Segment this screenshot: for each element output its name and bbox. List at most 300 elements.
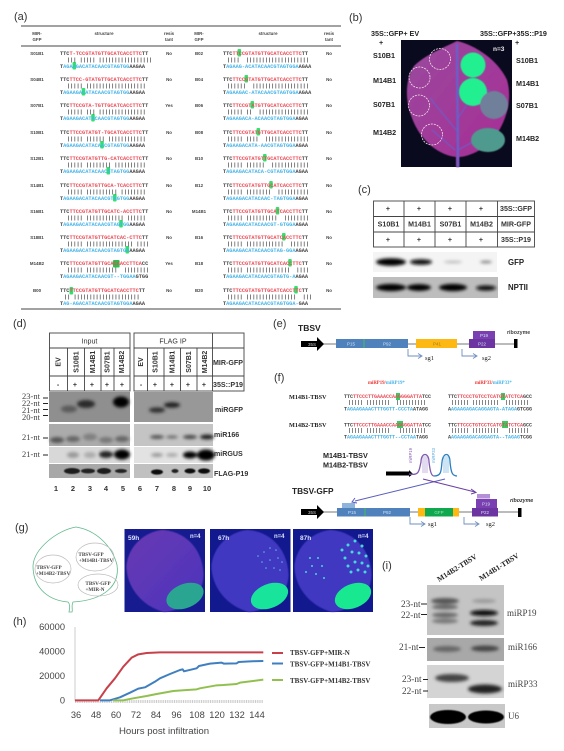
infiltration ellipses: +M14B1-TBSV [79,558,113,564]
right column rows: ||||| |||||||||||||| |||| [227,268,309,274]
right labels: 35S::GFP+35S::P19 [480,29,547,38]
size markers [22,391,48,459]
panel i: small RNA blots [382,551,538,728]
panel a: sequence table [14,11,341,309]
condition table: M14B1 [90,351,97,373]
M14B2 sequences: TTCTTCCCTTGAAACCAAGGGGATTATCC [344,422,431,428]
lane numbers: 3 [88,484,92,493]
left column rows: ||||| ||| ||||||||||||||| [67,110,146,116]
right column rows: TTCTTCCGTATGTTGCATCACCTTCTT [223,261,308,267]
right column rows: TAGAAGACA-ACAACGTAGTGGAAGAA [223,116,309,122]
condition table: M14B2 [470,220,493,228]
panel label a: (a) [14,11,27,23]
panel label h: (h) [13,616,26,628]
left column rows: No [166,209,172,214]
left column rows: S18B1 [30,235,44,240]
x axis labels: 144 [249,710,265,720]
right column rows: No [326,130,332,135]
sequence headers: miRP19/miRP19* [368,381,405,386]
ribozyme label: ribozyme [510,498,533,504]
y axis labels: 0 [60,696,65,706]
FLAG-P19 blot [49,464,213,478]
left column rows: TTCTTCCGTATGTTGCATC-ACCTTCTT [60,209,148,215]
M14B2 sequences: TTCTTCCCTGTCCTCATGTATCTCAGCC [448,422,532,428]
panel c: western blot [358,184,534,298]
condition table: MIR-GFP [501,220,531,228]
right column rows: B08 [195,130,204,135]
condition table: M14B2 [119,351,126,373]
condition table: + [479,236,483,244]
blot labels: GFP [508,258,524,267]
table header [32,31,335,42]
sg labels [428,521,495,528]
right column rows: B02 [195,51,204,56]
right column rows: TAGAAGACATACAACGTAGTG-AAGAA [223,274,309,280]
construct names [289,394,327,429]
left column rows: ||||| |||||||||||| |||||| [67,216,146,222]
legend [272,649,370,685]
right column rows: TAGAAGACATACAAC-TAGTGGAAGAA [223,196,309,202]
sg labels [425,355,491,362]
left column rows: TTCT-TCCGTATGTTGCATCACCTTCTT [60,51,148,57]
left labels: 35S::GFP+ EV [371,29,419,38]
leaf outline diagram [33,527,117,612]
TBSV-GFP genes: GFP [434,510,444,515]
GFP blot [373,252,497,272]
panel label c: (c) [358,184,371,196]
left column rows: TTCTTCC-GTATGTTGCATCACCTTCTT [60,77,148,83]
right column rows: |||| |||||||||||||||||||| [227,58,309,64]
construct names: M14B2-TBSV [289,422,327,429]
M14B1 sequences: TTCTTCCCTTGAAACCAAGGGGATTATCC [344,394,431,400]
y axis labels [39,622,65,706]
right column rows: ||||| |||||||| |||||||||| [227,190,309,196]
left column rows: S12B1 [30,156,44,161]
lane numbers [54,484,211,493]
photo 67h [210,529,292,614]
sequence headers: miRP33/miRP33* [475,381,512,386]
size markers: 21-nt [22,405,41,415]
left labels: M14B2 [373,128,396,137]
right column rows: TTCTTCCGTATGTTGCATCACCTTCTT [223,235,308,241]
condition table: + [386,205,390,213]
photo 67h: n=4 [274,534,285,540]
condition table: MIR-GFP [213,359,243,367]
size markers: 22-nt [402,687,422,697]
x axis labels: 108 [189,710,205,720]
right column rows: TTCTTCCGTATGTTGCATCACCTTCTT [223,130,308,136]
right column rows: TTCTTCCGTATGTTGCATCACCTTCTT [223,103,308,109]
y axis labels: 40000 [39,646,65,656]
right labels: + [515,38,519,47]
photo 87h: 87h [300,535,311,542]
left column rows: TAGAAGACATACAACGTAGTGGAAGAA [60,116,146,122]
right column rows [192,49,332,307]
left column rows: TTCTTCCGTATGTTGCATCACCTTCTT [60,288,145,294]
right column rows: No [326,209,332,214]
left column rows: TAGAAGACATACAACGTAGTGGAAGAA [60,143,146,149]
panel label d: (d) [13,318,26,330]
condition table: S10B1 [378,220,399,228]
M14B1 sequences: AAGAAGAGACAGGAGTA-ATAGAGTCGG [448,406,532,412]
right column rows: TAGAAGACATACA-CGTAGTGGAAGAA [223,169,309,175]
panel h: line chart [13,616,370,737]
U6 blot [429,704,505,728]
lane numbers: 10 [203,484,211,493]
legend: TBSV-GFP+M14B1-TBSV [290,660,370,668]
left labels: S07B1 [373,100,395,109]
condition table: + [448,205,452,213]
condition table: 35S::GFP [500,205,532,213]
condition table: + [73,381,77,389]
x axis labels [71,710,265,720]
lane numbers: 7 [155,484,159,493]
left column rows: No [166,77,172,82]
size markers: 23-nt [22,391,41,401]
left column rows: TTCTTCCGTATGT-TGCATCACCTTCTT [60,130,148,136]
left column rows: TTCTTCCGTATGTTGCA-TCACCTTCTT [60,183,148,189]
genes: P92 [383,342,391,346]
infiltration ellipses: +M14B2-TBSV [36,571,70,577]
construct names: M14B1-TBSV [289,394,327,401]
left column rows: Yes [165,103,173,108]
miRP19 blot [427,585,504,635]
right column rows: TAGAAGAC-ATACAACGTAGTGGAAGAA [223,90,312,96]
left column rows: No [166,235,172,240]
right column rows: B12 [195,183,204,188]
condition table [50,333,244,391]
right column rows: No [326,51,332,56]
left column rows: M14B2 [30,261,45,266]
data lines [75,652,263,700]
left column rows: No [166,183,172,188]
table header: tant [165,37,174,42]
condition table [374,201,534,247]
size markers: 20-nt [22,412,41,422]
right column rows: No [326,77,332,82]
x axis labels: 48 [91,710,101,720]
table header: structure [94,31,114,36]
miRGUS blot [49,447,215,463]
dashed circles [408,48,450,145]
blot labels: FLAG-P19 [214,470,248,478]
left column rows: TTCTTCCGTATGTTG-CATCACCTTCTT [60,156,148,162]
size markers: 21-nt [399,643,419,653]
right column rows: TAGAAGACATA-AACGTAGTGGAAGAA [223,143,309,149]
genes: P41 [433,342,441,346]
left column rows: S16B1 [30,209,44,214]
lane labels: M14B1-TBSV [477,551,521,583]
amiRNA construct labels [323,451,368,470]
M14B2 sequences [344,421,532,440]
condition table: + [386,236,390,244]
right column rows: B06 [195,103,204,108]
TBSV-GFP genes: P22 [481,510,489,515]
left column rows: TAGAAGACATACAACGTAGTGGAAGAA [60,222,146,228]
genes: P22 [478,342,486,346]
n label: n=3 [493,46,505,53]
condition table: + [202,381,206,389]
infiltration ellipses: TBSV-GFP [36,565,62,571]
photo 59h: 59h [128,535,139,542]
right column rows: ||||| |||||| |||||||||||| [227,162,309,168]
panel e: TBSV genome [273,318,530,362]
condition table: M14B1 [170,351,176,373]
genes: P15 [347,342,355,346]
condition table: EV [138,357,145,367]
x axis labels: 120 [209,710,225,720]
left column rows: TAGAAGACATACAACGT--TGGAAGTGG [60,274,148,280]
panel c: western blot: NPTII [508,283,528,292]
TBSV-GFP genes: P15 [348,510,356,515]
35S arrow [301,505,324,519]
TBSV-GFP genes: P19 [482,502,490,506]
panel g: infiltration diagram and photos [15,522,375,614]
panel label b: (b) [349,12,362,24]
size markers: 21-nt [22,449,41,459]
sg labels: sg1 [425,355,434,362]
right column rows: No [326,183,332,188]
condition table: S10B1 [74,351,80,373]
left column rows: ||||| |||||||| |||||||||| [67,162,146,168]
condition table: + [120,381,124,389]
lane numbers: 2 [71,484,75,493]
condition table: 35S::P19 [501,236,531,244]
right column rows: M14B1 [192,209,207,214]
lane labels [435,551,521,584]
hairpin precursor: miRP33 [431,447,436,463]
right column rows: TTCTTCCGTATGTTGCATCACCTTCTT [223,183,308,189]
left column rows: ||||| |||||||||| |||||||| [67,190,146,196]
sg labels: sg2 [486,521,495,528]
right column rows: ||||| |||||||||| |||||||| [227,216,309,222]
condition table: - [57,381,60,389]
photo 67h: 67h [218,535,229,542]
genome backbone [320,343,516,345]
photo 87h [293,529,375,614]
panel d: northern blots [13,318,248,493]
condition table: S07B1 [186,351,193,373]
genes: P19 [480,333,488,338]
panel b: leaf photo [349,12,547,167]
leaf image background [401,40,512,167]
right column rows: ||||| |||||||||||||||| ||| [227,294,312,300]
lane numbers: 4 [104,484,109,493]
left column rows: TTCTTCCGTATGTTGCATCAC-CTTCTT [60,235,148,241]
right labels [480,29,547,143]
blot labels: miRGUS [214,450,243,458]
M14B1 sequences: TAGAAGAAACTTTGGTT-CCCTAATAGG [344,406,428,412]
panel label g: (g) [15,522,28,534]
condition table: FLAG IP [159,338,187,346]
table header: resis [324,31,335,36]
blot labels: miR166 [508,642,538,652]
right column rows: ||||| |||||||||||| |||||| [227,242,309,248]
condition table: S10B1 [152,351,160,373]
35S arrow: 35S [308,510,316,515]
left column rows: No [166,288,172,293]
table header: structure [258,31,278,36]
left labels: S10B1 [373,51,395,60]
left column rows: TAGAAGACATACAACGTAGTGGAAGAA [60,248,146,254]
condition table: + [186,381,190,389]
M14B2 sequences: TAGAAGAAACTTTGGTT--CCTAATAGG [344,434,428,440]
right column rows: No [326,235,332,240]
x axis labels: 72 [131,710,141,720]
title TBSV: TBSV [298,323,321,333]
insertion arrows [352,479,476,503]
ribozyme label: ribozyme [507,330,530,336]
right labels: S10B1 [516,56,538,65]
left column rows: TAGAAGACATACAACGTAGTGGAAGAA [60,169,146,175]
right column rows: TAGAAGACATACAACGTAG-GGAAGAA [223,248,309,254]
lane numbers: 1 [54,484,58,493]
left column rows: TAGAAGACATACAACGTAGTGGAAGAA [60,90,146,96]
left column rows: ||||| ||||||||||||||||||| [67,84,146,90]
x axis labels: 132 [229,710,245,720]
sg labels: sg1 [428,521,437,528]
left column rows: S01B1 [30,51,44,56]
photo 87h: n=4 [358,534,369,540]
right column rows: TAGAAGACATACAACGT-GTGGAAGAA [223,222,309,228]
right column rows: B16 [195,235,204,240]
legend: TBSV-GFP+MIR-N [290,649,350,657]
x axis title: Hours post infiltration [119,726,209,737]
blot labels: miRGFP [215,406,243,414]
blot labels [507,608,538,721]
table header: MIR- [32,31,42,36]
right column rows: TAGAAG-ACATACAACGTAGTGGAAGAA [223,64,312,70]
M14B2 sequences: |||||| ||||||||| ||||||| [451,428,529,434]
genes [336,331,518,348]
right column rows: No [326,261,332,266]
panel label f: (f) [274,372,284,384]
M14B2 sequences: ||||| |||||||| ||||||||| [348,428,426,434]
lane numbers: 6 [138,484,142,493]
size markers: 21-nt [22,432,41,442]
miRP33 blot [427,665,504,698]
35S promoter arrow: 35S [308,342,316,347]
left column rows: TTCTTCCGTATGTTGCACAACCTTCACC [60,261,148,267]
condition table: M14B1 [408,220,431,228]
left labels: + [379,38,383,47]
hairpin precursor: miRP19 [408,447,413,463]
left column rows: S10B1 [30,130,44,135]
infiltration ellipses: +MIR-N [85,587,105,593]
right column rows: No [326,103,332,108]
miRGFP blot [49,392,213,422]
left column rows: ||||| ||||||||||||||| |||| [67,242,149,248]
sequence headers [368,381,512,386]
left column rows: S04B1 [30,77,44,82]
infiltration ellipses [35,543,118,596]
right column rows: B18 [195,261,204,266]
M14B1 sequences [344,393,532,412]
table header: resis [164,31,175,36]
M14B1 sequences: TTCTTCCCTGTCCTCATGTATCTCAGCC [448,394,532,400]
M14B1 sequences: |||||| ||||||||| |||||||| [451,400,529,406]
left column rows: ||||| |||||| |||||||||||| [67,136,146,142]
condition table: + [153,381,157,389]
right labels: M14B2 [516,134,539,143]
condition table: + [90,381,94,389]
right column rows: No [326,156,332,161]
left column rows: TAG-AGACATACAACGTAGTGGAAGAA [60,301,146,307]
condition table: + [417,205,421,213]
lane numbers: 8 [172,484,176,493]
M14B2 sequences: AAGAAGAGACAGGAGTA--TAGAGTCGG [448,434,532,440]
left column rows: S07B1 [30,103,44,108]
hairpin precursor [386,447,457,477]
left column rows: No [166,51,172,56]
sg labels: sg2 [482,355,491,362]
condition table: S07B1 [104,351,112,373]
table header: GFP [194,37,204,42]
y axis labels: 60000 [39,622,65,632]
condition table: Input [82,338,97,346]
right labels: S07B1 [516,101,538,110]
blot labels: miRP33 [508,679,538,689]
x axis labels: 96 [171,710,182,720]
TBSV-GFP genes [337,494,522,517]
left column rows: TAGAAGACATACAACGTAGTGGAAGAA [60,64,146,70]
left labels: M14B1 [373,76,396,85]
miR166 blot [427,638,504,661]
condition table: + [479,205,483,213]
lane labels: M14B2-TBSV [435,552,479,584]
size markers [399,600,428,697]
blot labels: U6 [508,711,519,721]
left column rows: ||||| |||||||||| |||||||| [67,268,149,274]
condition table: + [170,381,174,389]
left column rows: Yes [165,261,173,266]
left column rows: TTCTTCCGTA-TGTTGCATCACCTTCTT [60,103,148,109]
size markers: 23-nt [401,600,421,610]
amiRNA construct labels: M14B2-TBSV [323,460,368,470]
table header: MIR- [194,31,204,36]
left column rows [30,51,173,307]
TBSV-GFP genes: P92 [383,510,391,515]
condition table: + [105,381,109,389]
photo 59h [124,529,208,614]
table header: tant [325,37,334,42]
right column rows: B04 [195,77,204,82]
left labels [371,29,419,137]
panel label e: (e) [273,318,286,330]
left column rows: ||| ||||| ||||||||||||||||| [67,58,152,64]
subgenomic arrows [410,517,479,526]
M14B1 sequences: ||||| |||||||| |||||||||| [348,400,426,406]
left column rows: B00 [33,288,42,293]
condition table: EV [56,357,62,367]
green infiltrated spots [459,52,508,152]
right column rows: No [326,288,332,293]
right column rows: B20 [195,288,204,293]
right column rows: TTCTTCCGTATGTTGCATCACCTTCTT [223,209,308,215]
size markers: 22-nt [22,398,41,408]
35S promoter arrow [301,337,324,351]
panel label i: (i) [382,560,392,572]
legend: TBSV-GFP+M14B2-TBSV [290,677,370,685]
NPTII blot [373,277,498,298]
size markers: 23-nt [402,675,422,685]
size markers: 22-nt [401,611,421,621]
blot labels: miRP19 [507,608,537,618]
left column rows: S14B1 [30,183,44,188]
axes [75,627,263,702]
left column rows: No [166,130,172,135]
left column rows: TAGAAGACATACAACGTAGTGGAAGAA [60,196,146,202]
